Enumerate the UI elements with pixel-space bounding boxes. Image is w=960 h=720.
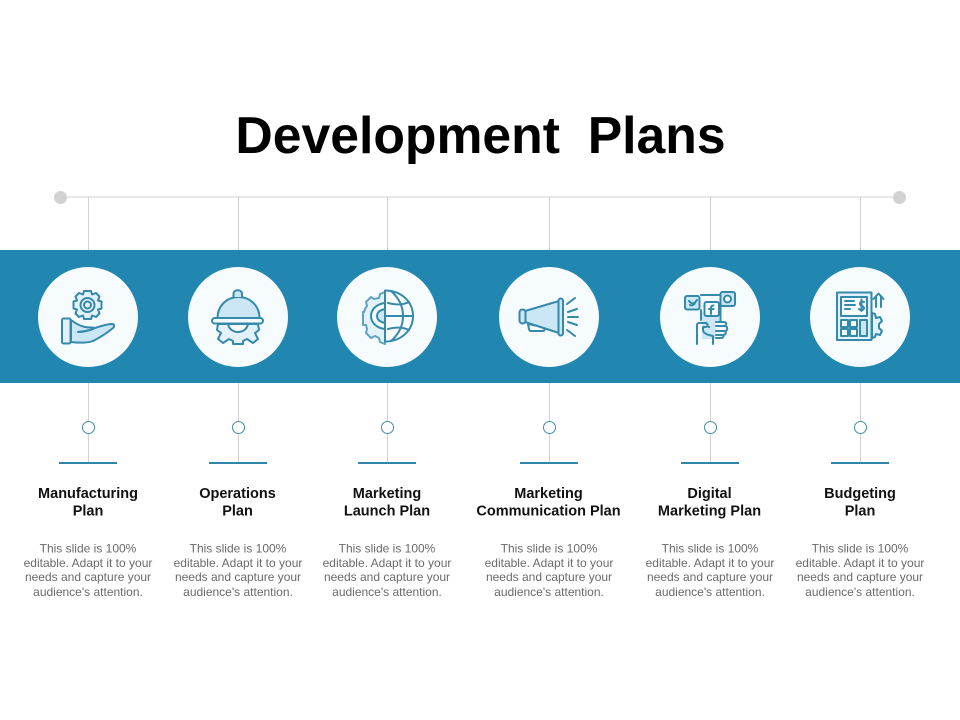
icon: hand holding phone with social apps [660,267,760,367]
description: This slide is 100% [40,542,137,556]
connector and marker [520,383,578,464]
icon: gear and globe [337,267,437,367]
description: needs and capture your [324,570,450,584]
teal band [0,250,960,383]
description: This slide is 100% [501,542,598,556]
heading: Marketing [353,486,421,502]
description: editable. Adapt it to your [24,556,152,570]
description: needs and capture your [25,570,151,584]
panel: digital marketing plan [646,267,774,599]
heading: Plan [845,504,875,520]
description: needs and capture your [647,570,773,584]
connector and marker [831,383,889,464]
description: needs and capture your [175,570,301,584]
description: needs and capture your [486,570,612,584]
timeline rail with end dots and connectors [54,191,906,250]
description: This slide is 100% [662,542,759,556]
heading: Budgeting [824,486,896,502]
description: This slide is 100% [812,542,909,556]
connector and marker [209,383,267,464]
description: editable. Adapt it to your [485,556,613,570]
description: audience's attention. [183,585,293,599]
heading: Plan [222,504,253,520]
heading: Operations [199,486,276,502]
panel: operations plan [174,267,302,599]
heading: Manufacturing [38,486,138,502]
panel: marketing communication plan [476,267,621,599]
heading: Marketing [514,486,583,502]
description: audience's attention. [655,585,765,599]
icon: hand holding gear [38,267,138,367]
connector and marker [681,383,739,464]
connector and marker [59,383,117,464]
description: audience's attention. [33,585,143,599]
description: editable. Adapt it to your [323,556,451,570]
description: audience's attention. [494,585,604,599]
icon: megaphone [499,267,599,367]
description: needs and capture your [797,570,923,584]
heading: Plan [73,504,103,520]
description: This slide is 100% [190,542,287,556]
description: editable. Adapt it to your [646,556,774,570]
panel: budgeting plan [796,267,924,599]
connector and marker [358,383,416,464]
description: editable. Adapt it to your [174,556,302,570]
heading: Launch Plan [344,504,430,520]
icon: hard hat and gear [188,267,288,367]
description: editable. Adapt it to your [796,556,924,570]
title: Development Plans [235,106,726,164]
panel: marketing launch plan [323,267,451,599]
description: This slide is 100% [339,542,436,556]
icon: calculator with gear and arrows [810,267,910,367]
heading: Digital [687,486,732,502]
description: audience's attention. [332,585,442,599]
heading: Marketing Plan [658,504,761,520]
panel: manufacturing plan [24,267,152,599]
description: audience's attention. [805,585,915,599]
heading: Communication Plan [476,504,621,520]
